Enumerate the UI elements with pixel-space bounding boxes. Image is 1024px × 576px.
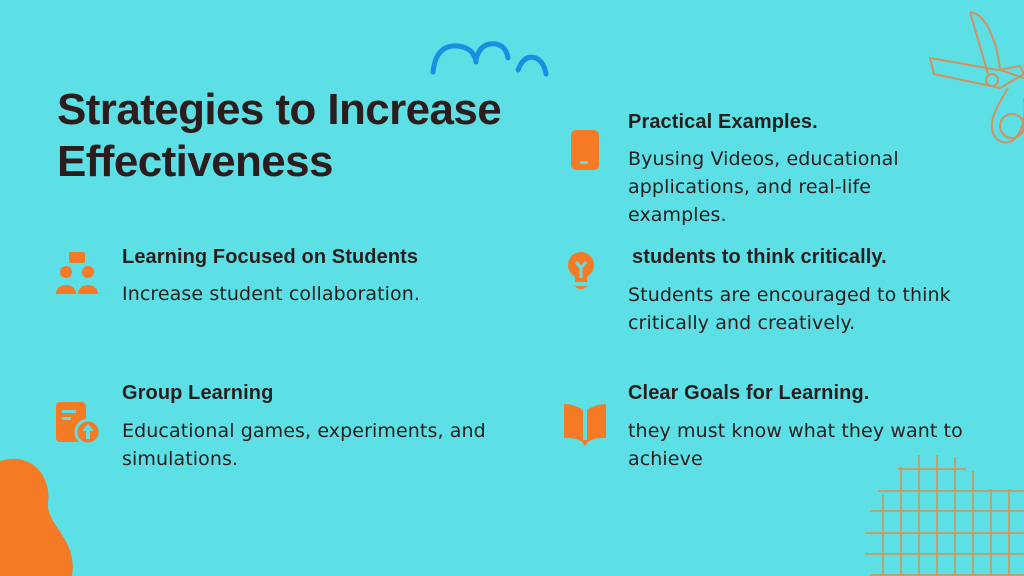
icon: lightbulb <box>568 252 594 289</box>
body: achieve <box>628 448 703 470</box>
decorative grid <box>865 455 1024 576</box>
heading: students to think critically. <box>632 246 887 268</box>
item: clear goals <box>564 382 963 470</box>
decorative clouds <box>430 41 548 76</box>
icon: open book <box>564 404 606 446</box>
decorative orange blob <box>0 458 73 576</box>
item: learning focused on students <box>56 246 420 305</box>
decorative scissors <box>928 11 1024 144</box>
body <box>628 420 963 470</box>
body: they must know what they want to <box>628 420 963 442</box>
title: Strategies to Increase <box>57 85 501 134</box>
heading: Learning Focused on Students <box>122 246 418 268</box>
item: critical thinking <box>568 246 951 334</box>
body: applications, and real-life <box>628 176 871 198</box>
item: group learning <box>56 382 486 470</box>
body <box>122 420 486 470</box>
title: Effectiveness <box>57 137 333 186</box>
item: practical examples <box>571 111 899 226</box>
icon: document upload <box>56 402 98 442</box>
heading: Clear Goals for Learning. <box>628 382 869 404</box>
icon: phone <box>571 130 599 170</box>
heading: Practical Examples. <box>628 111 818 133</box>
body: Increase student collaboration. <box>122 283 420 305</box>
body <box>628 148 899 226</box>
heading: Group Learning <box>122 382 273 404</box>
body: examples. <box>628 204 727 226</box>
icon: people chat <box>56 252 98 294</box>
body: Students are encouraged to think <box>628 284 951 306</box>
body: critically and creatively. <box>628 312 855 334</box>
body: Educational games, experiments, and <box>122 420 486 442</box>
body: Byusing Videos, educational <box>628 148 899 170</box>
body <box>628 284 951 334</box>
body: simulations. <box>122 448 238 470</box>
title <box>57 85 501 186</box>
